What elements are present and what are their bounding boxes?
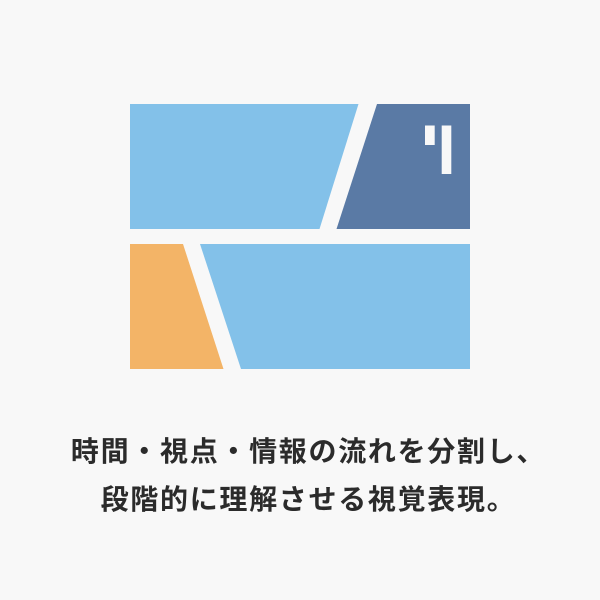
icon: short white mark	[425, 126, 435, 145]
panel: top left light blue	[130, 104, 358, 229]
caption text: 段階的に理解させる視覚表現。	[101, 484, 516, 515]
caption text: 時間・視点・情報の流れを分割し、	[71, 436, 546, 467]
panel: bottom right light blue	[200, 244, 470, 369]
panel: bottom left orange	[130, 244, 224, 369]
icon: long white mark	[442, 126, 451, 174]
caption text	[71, 436, 546, 515]
panel: top right dark blue with marks	[336, 104, 470, 229]
